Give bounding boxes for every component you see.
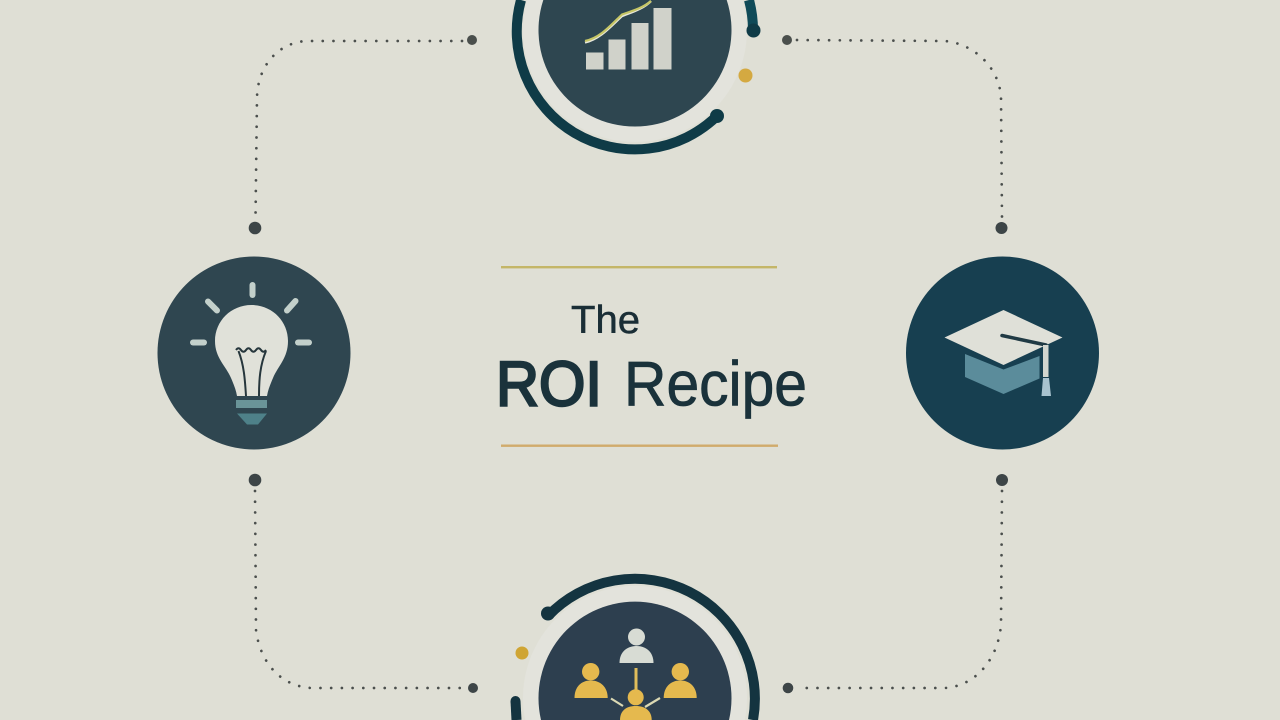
accent dot: top node bbox=[738, 68, 752, 82]
icon: people network bbox=[574, 628, 697, 720]
accent dot: bottom node bbox=[516, 646, 528, 660]
node: growth chart (top) bbox=[517, 0, 760, 149]
ring: bottom node arcs bbox=[510, 579, 755, 720]
title block: ROI bbox=[496, 350, 602, 420]
connector: top-right dotted path bbox=[782, 35, 1008, 234]
connector: bottom-right dotted path bbox=[783, 474, 1008, 693]
node: graduation cap (right) bbox=[906, 256, 1099, 450]
icon: bar chart bbox=[585, 1, 672, 70]
title block bbox=[496, 266, 807, 447]
connector: bottom-left dotted path bbox=[249, 474, 478, 693]
title block: The bbox=[571, 299, 640, 342]
connector: top-left dotted path bbox=[249, 35, 477, 234]
icon: graduation cap bbox=[944, 310, 1062, 396]
title block: Recipe bbox=[624, 350, 807, 420]
ring: top node arcs bbox=[517, 0, 760, 149]
node: team network (bottom) bbox=[510, 579, 755, 720]
node: idea lightbulb (left) bbox=[158, 256, 350, 450]
icon: lightbulb bbox=[193, 285, 309, 424]
